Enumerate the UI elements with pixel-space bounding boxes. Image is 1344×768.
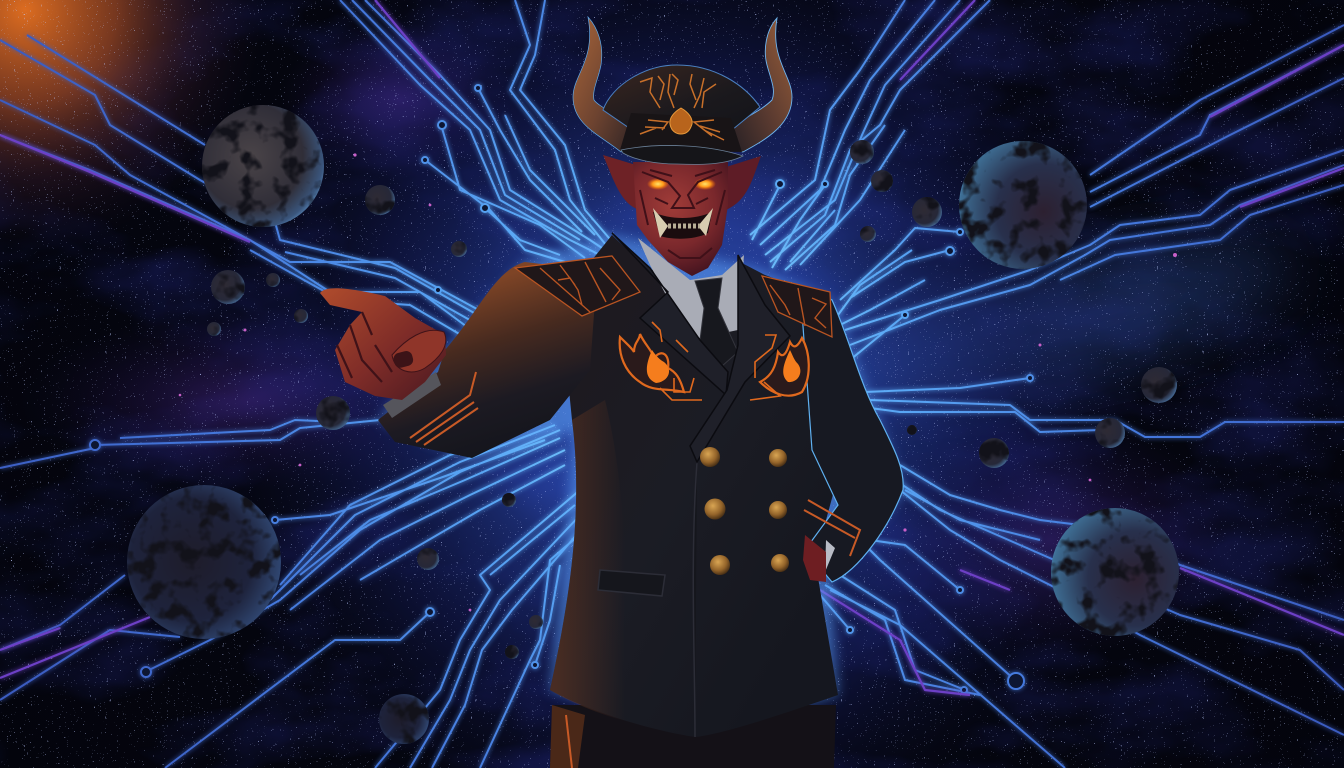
- shirt: [638, 238, 744, 340]
- planet: lower right large: [1051, 508, 1179, 636]
- necktie: [695, 278, 738, 366]
- pointing hand: [320, 288, 446, 400]
- ear: left: [603, 155, 640, 210]
- horn: right: [730, 18, 792, 152]
- cap badge: [670, 108, 692, 134]
- cap circuit embroidery: [640, 74, 724, 140]
- brow and nose: [640, 170, 725, 258]
- thumbnail: [392, 350, 414, 369]
- eye: left: [647, 178, 669, 190]
- figure: demon officer: [320, 17, 905, 768]
- planet: upper right large: [959, 141, 1087, 269]
- circuit: upper left: [0, 35, 490, 345]
- jacket front seam and pocket: [598, 462, 697, 737]
- circuit: top centre right: [750, 0, 990, 270]
- planet cluster: small moons: [207, 140, 1177, 659]
- figure halo: [378, 235, 905, 737]
- lapel: left: [612, 233, 728, 395]
- demon face: [633, 162, 728, 276]
- thumb: [392, 330, 446, 372]
- arm: hip sleeve: [800, 285, 903, 582]
- cap crown: [603, 65, 760, 130]
- planets: [127, 105, 1179, 744]
- horn: left: [573, 17, 636, 152]
- circuit: middle left: [0, 420, 380, 468]
- curled fingers: [337, 312, 392, 382]
- epaulette: right: [762, 276, 832, 337]
- jacket torso: [550, 235, 848, 737]
- lapel: right: [690, 255, 790, 462]
- hand on hip: [803, 535, 826, 582]
- emblem: left flame: [620, 322, 702, 400]
- circuit: upper right: [838, 25, 1344, 360]
- buttons: [700, 447, 789, 575]
- palm and index finger: [320, 288, 446, 400]
- cap visor: [621, 145, 743, 164]
- jacket torso lit edge: [550, 400, 640, 725]
- mouth with teeth: [653, 212, 712, 239]
- circuit: middle right: [865, 378, 1344, 437]
- circuit: bottom centre: [375, 490, 585, 768]
- eye: right: [694, 178, 716, 190]
- circuit: top centre left: [340, 0, 615, 262]
- circuit: lower left: [0, 418, 565, 768]
- arm: pointing sleeve: [378, 262, 595, 458]
- circuit: nodes: [90, 85, 1033, 693]
- circuit: lower right: [820, 465, 1344, 768]
- emblem: right flame: [750, 335, 809, 400]
- ear: right: [726, 156, 761, 210]
- planet: lower left large: [127, 485, 281, 639]
- officer cap: [603, 65, 760, 164]
- cap band: [620, 113, 742, 152]
- planet: bottom left medium: [379, 694, 429, 744]
- trousers: [550, 705, 836, 768]
- epaulette: left: [515, 256, 640, 316]
- planet: upper left large: [202, 105, 324, 227]
